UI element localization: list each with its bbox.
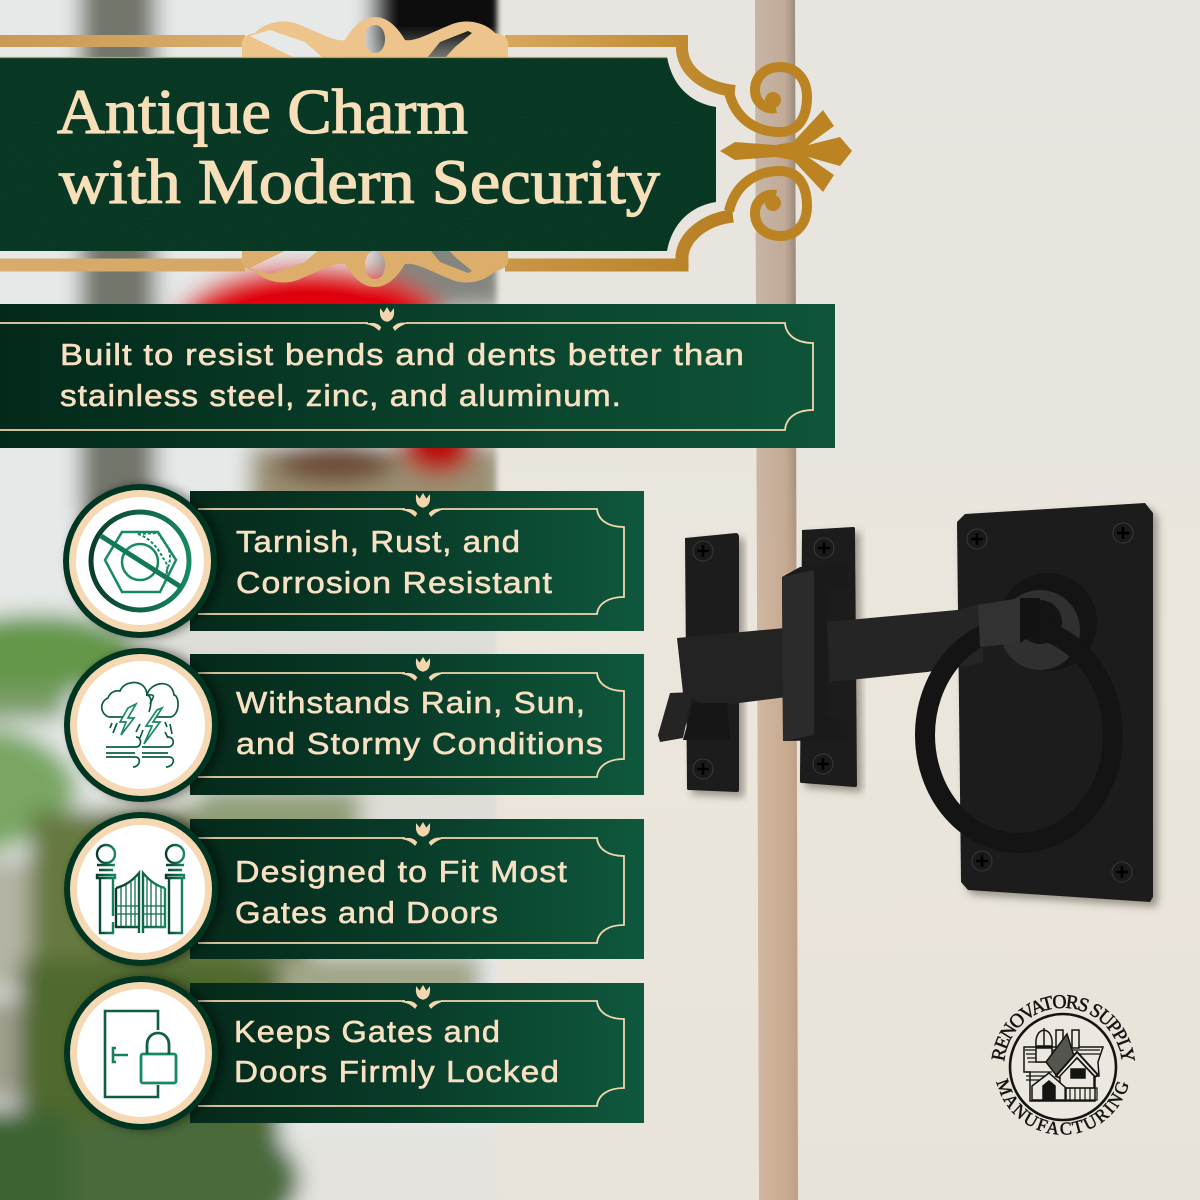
text [235, 854, 568, 930]
strength claim text: stainless steel, zinc, and aluminum. [60, 378, 622, 413]
text [234, 1014, 560, 1089]
title text: with Modern Security [59, 146, 660, 217]
rosette [999, 573, 1097, 671]
background photo: blurred window, flowers, leaves and door [0, 0, 798, 1200]
text: Keeps Gates and [234, 1014, 501, 1049]
text: Gates and Doors [235, 895, 499, 930]
text: Doors Firmly Locked [234, 1054, 560, 1089]
screws [693, 523, 1133, 882]
strength claim text: Built to resist bends and dents better than [60, 337, 745, 372]
icon: door with padlock [64, 976, 218, 1130]
decorative gold frame around title [0, 17, 852, 287]
top flourish [242, 17, 508, 58]
text: Withstands Rain, Sun, [236, 685, 586, 720]
logo: Renovators Supply Manufacturing [991, 994, 1136, 1135]
icon: storm clouds and wind [64, 648, 218, 802]
text: Designed to Fit Most [235, 854, 568, 889]
product photo: black iron ring gate latch [658, 503, 1153, 902]
logo lettering: MANUFACTURING [996, 1078, 1128, 1135]
icon: rusted nut with no symbol [63, 484, 217, 638]
logo lettering: RENOVATORS SUPPLY [991, 994, 1136, 1062]
icon: gate between pillars [64, 812, 218, 966]
panel: corrosion resistant [63, 484, 644, 638]
ring backplate [957, 503, 1153, 902]
door post [755, 0, 798, 1200]
text: Tarnish, Rust, and [236, 524, 521, 559]
strength claim text [60, 337, 745, 413]
title text: Antique Charm [57, 76, 468, 147]
text: Corrosion Resistant [236, 565, 553, 600]
panel: strength claim [0, 304, 835, 448]
panel: weather resistant [64, 648, 644, 802]
right scroll ornament [720, 67, 852, 236]
text [236, 685, 604, 761]
ring handle [925, 598, 1113, 843]
panel: fits most gates and doors [64, 812, 644, 966]
title panel [0, 57, 717, 251]
lever bar [658, 565, 983, 742]
text [236, 524, 553, 600]
logo house drawing [1024, 1028, 1103, 1101]
title text [57, 76, 660, 217]
bottom flourish [242, 246, 508, 287]
text: and Stormy Conditions [236, 726, 604, 761]
middle plate [800, 527, 857, 787]
logo lettering [991, 994, 1136, 1135]
panel: keeps gates locked [64, 976, 644, 1130]
left strike plate [685, 533, 739, 792]
